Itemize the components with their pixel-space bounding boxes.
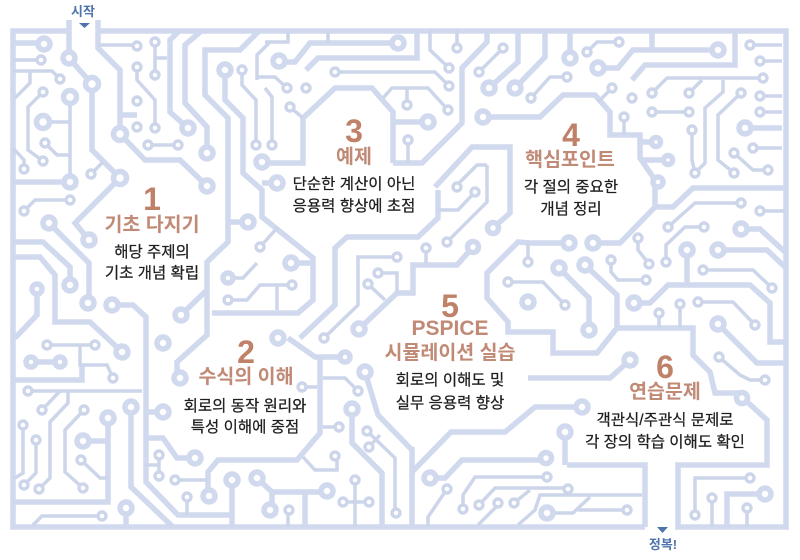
step 4 text: 4 bbox=[562, 117, 580, 153]
step 1 text: 1 bbox=[143, 181, 161, 217]
step 2 text: 특성 이해에 중점 bbox=[191, 418, 299, 436]
step 6 text: 6 bbox=[656, 349, 674, 385]
step 3 text: 예제 bbox=[336, 146, 372, 168]
start marker: 시작 bbox=[71, 4, 95, 19]
start marker bbox=[71, 4, 95, 28]
step 4 text: 각 절의 중요한 bbox=[524, 178, 618, 196]
step 5 text: 5 bbox=[441, 288, 459, 324]
step 2 text: 2 bbox=[237, 334, 255, 370]
step 2 text: 수식의 이해 bbox=[198, 366, 294, 388]
step 6 text: 각 장의 학습 이해도 확인 bbox=[585, 433, 745, 451]
step 5 text bbox=[384, 288, 516, 412]
step 2 text bbox=[184, 334, 306, 436]
step 5 text: 시뮬레이션 실습 bbox=[384, 342, 516, 364]
step 5 text: 실무 응용력 향상 bbox=[396, 394, 504, 412]
step 3 text: 단순한 계산이 아닌 bbox=[293, 175, 415, 193]
step 4 text: 핵심포인트 bbox=[525, 149, 615, 171]
step 3 text bbox=[293, 113, 415, 215]
step 6 text: 객관식/주관식 문제로 bbox=[597, 411, 733, 429]
finish marker: 정복! bbox=[649, 537, 677, 552]
step 4 text: 개념 정리 bbox=[540, 200, 602, 218]
step 6 text bbox=[585, 349, 745, 451]
step 1 text bbox=[104, 181, 200, 282]
step 1 text: 해당 주제의 bbox=[114, 243, 190, 261]
step 3 text: 3 bbox=[345, 113, 363, 149]
step 1 text: 기초 개념 확립 bbox=[105, 264, 199, 282]
step 5 text: 회로의 이해도 및 bbox=[396, 371, 504, 389]
step 3 text: 응용력 향상에 초점 bbox=[293, 197, 415, 215]
step 2 text: 회로의 동작 원리와 bbox=[184, 397, 306, 415]
finish marker bbox=[649, 527, 677, 552]
step 4 text bbox=[524, 117, 618, 218]
step 5 text: PSPICE bbox=[411, 317, 489, 340]
step 1 text: 기초 다지기 bbox=[104, 214, 200, 236]
step 6 text: 연습문제 bbox=[629, 381, 701, 403]
